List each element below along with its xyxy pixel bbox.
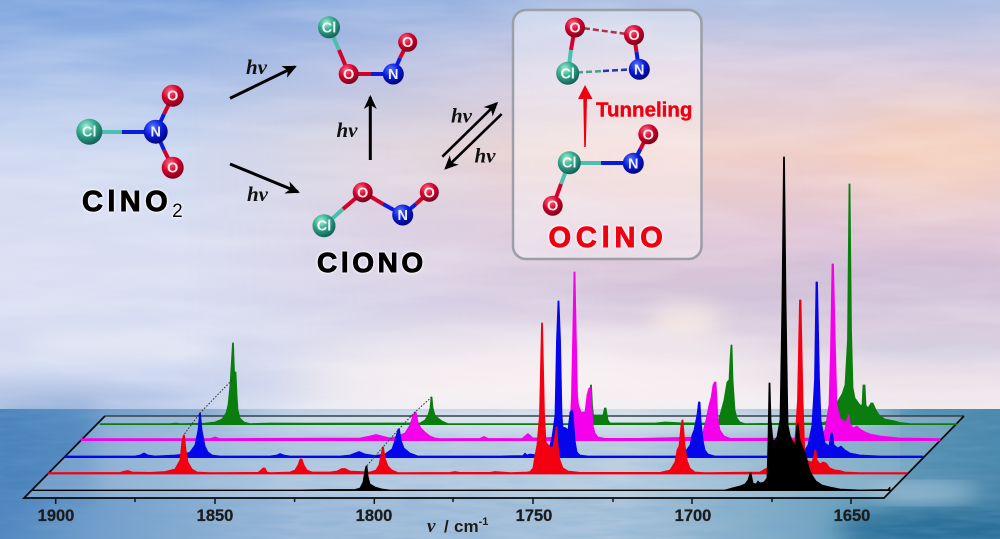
x axis ticks — [56, 498, 851, 504]
x axis tick labels: 1700 — [675, 507, 711, 525]
molecule: OClNO — [543, 124, 658, 216]
molecule: ClNO2: N — [150, 125, 161, 141]
background: sea — [0, 405, 1000, 539]
label: OClNO: OClNO — [548, 222, 668, 254]
arrows: ClONO and OClNO equilibrium — [442, 103, 502, 168]
molecule: ClONO top: Cl — [322, 20, 336, 36]
molecule: tunneling product: N — [634, 62, 645, 78]
x axis tick labels: 1750 — [516, 507, 552, 525]
x axis tick labels: 1800 — [356, 507, 392, 525]
molecule: ClNO2: O — [167, 89, 178, 105]
label: ClNO2: ClNO — [82, 186, 172, 218]
x axis title: ν — [427, 516, 436, 537]
label: Tunneling: Tunneling — [596, 98, 692, 122]
molecule: ClONO top: N — [388, 67, 399, 83]
arrow: ClNO2 to upper ClONO: hν — [246, 55, 268, 79]
spectrum: black trace — [33, 157, 890, 491]
molecule: ClONO lower: O — [424, 185, 435, 201]
arrow: ClNO2 to upper ClONO — [230, 55, 295, 98]
panel: OClNO inset box — [513, 10, 702, 259]
x axis tick labels: 1900 — [38, 507, 74, 525]
arrow: lower ClONO to upper ClONO: hν — [336, 118, 358, 142]
molecule: OClNO: O — [547, 199, 558, 215]
plane of the 3D plot — [24, 416, 964, 498]
molecule: tunneling product: Cl — [560, 66, 575, 82]
molecule: ClONO lower: N — [397, 208, 408, 224]
spectrum: red trace — [48, 300, 907, 474]
molecule: tunneling product: O — [569, 20, 581, 36]
molecule: ClNO2: O — [167, 161, 178, 177]
arrow: ClNO2 to lower ClONO: hν — [247, 182, 269, 206]
arrows: ClONO and OClNO equilibrium: hν — [474, 144, 496, 168]
molecule: ClNO2 — [76, 85, 184, 179]
dotted guide lines linking peaks — [184, 380, 432, 466]
molecule: ClONO top: O — [402, 35, 413, 51]
label: ClNO2: 2 — [172, 201, 183, 222]
spectrum: magenta trace — [81, 264, 940, 441]
molecule: ClONO lower — [312, 182, 439, 237]
arrow: tunneling — [578, 85, 592, 147]
x axis tick labels — [38, 507, 870, 525]
chart: stacked IR spectra on a tilted plane — [24, 157, 964, 537]
arrows: ClONO and OClNO equilibrium: hν — [451, 104, 473, 128]
x axis tick labels: 1650 — [834, 507, 870, 525]
molecule: tunneling product: O — [628, 28, 640, 44]
molecule: ClONO top — [318, 16, 417, 84]
x axis title: / — [444, 517, 449, 536]
molecule: ClONO top: O — [343, 67, 354, 83]
arrow: ClNO2 to lower ClONO — [230, 164, 298, 206]
label: ClONO: ClONO — [317, 247, 427, 278]
molecule: tunneling product — [556, 18, 650, 85]
spectrum: green trace — [100, 184, 957, 425]
x axis title: -1 — [479, 516, 488, 528]
molecule: OClNO: N — [628, 156, 639, 172]
molecule: ClONO lower: Cl — [317, 219, 331, 235]
molecule: ClONO lower: O — [357, 185, 368, 201]
molecule: ClNO2: Cl — [82, 125, 97, 141]
molecule: OClNO: O — [643, 127, 654, 143]
x axis title: cm — [454, 517, 479, 536]
spectrum: blue trace — [65, 282, 923, 458]
arrow: lower ClONO to upper ClONO — [336, 97, 370, 160]
molecule: OClNO: Cl — [562, 156, 577, 172]
x axis tick labels: 1850 — [197, 507, 233, 525]
